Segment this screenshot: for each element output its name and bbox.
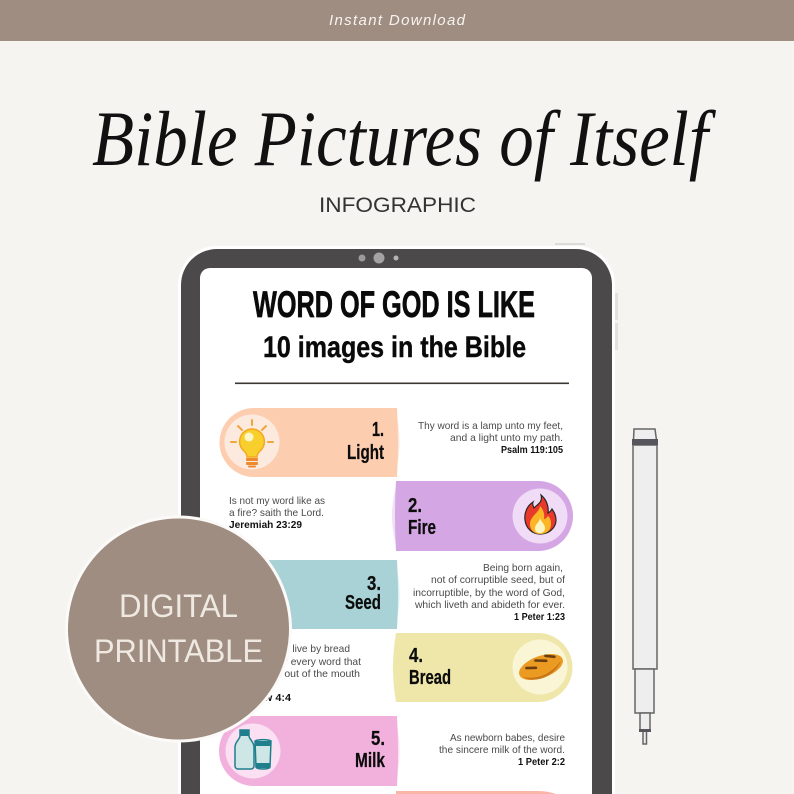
row 4: bread xyxy=(393,633,573,702)
icon: light bulb xyxy=(231,420,273,468)
verse 2: Jeremiah 23:29 xyxy=(229,519,302,531)
subtitle: INFOGRAPHIC xyxy=(319,194,476,217)
verse 5: the sincere milk of the word. xyxy=(439,744,565,756)
verse 4: proceedeth out of the mouth xyxy=(229,668,360,680)
row 2: fire xyxy=(392,481,573,551)
icon: flame xyxy=(525,495,556,534)
verse 4: Matthew 4:4 xyxy=(229,692,291,704)
verse 5: 1 Peter 2:2 xyxy=(518,756,565,768)
row 4: bread: 4. xyxy=(409,645,423,667)
verse 5 xyxy=(439,732,565,768)
row 3: seed xyxy=(220,560,400,629)
row 4: bread: Bread xyxy=(409,667,451,689)
verse 4: alone, but by every word that xyxy=(229,656,361,668)
verse 2: Is not my word like as xyxy=(229,495,325,507)
verse 1 xyxy=(418,420,563,456)
verse 2: a fire? saith the Lord. xyxy=(229,507,324,519)
verse 3: not of corruptible seed, but of xyxy=(431,574,565,586)
verse 3: Being born again, xyxy=(483,562,563,574)
verse 3: which liveth and abideth for ever. xyxy=(414,599,565,611)
row 3: seed: Seed xyxy=(345,592,381,614)
tablet device xyxy=(178,243,618,794)
icon: pen xyxy=(632,429,658,744)
verse 4: Man shall not live by bread xyxy=(229,643,350,655)
row 1: light: 1. xyxy=(372,419,384,441)
verse 1: Thy word is a lamp unto my feet, xyxy=(418,420,563,432)
badge: digital printable xyxy=(65,516,292,742)
verse 4 xyxy=(229,643,361,704)
verse 3: incorruptible, by the word of God, xyxy=(413,587,565,599)
badge: digital printable: PRINTABLE xyxy=(94,633,263,669)
row 5: milk xyxy=(219,716,400,786)
title: Bible Pictures of Itself xyxy=(92,95,716,182)
row 3: seed: 3. xyxy=(367,573,381,595)
verse 1: Psalm 119:105 xyxy=(501,444,563,456)
verse 2 xyxy=(229,495,325,531)
top banner: Instant Download xyxy=(329,12,466,29)
subheading: 10 images: 10 images in the Bible xyxy=(263,331,526,364)
row 6: partial pill xyxy=(396,791,556,794)
verse 3 xyxy=(413,562,565,623)
row 5: milk: Milk xyxy=(355,750,386,772)
row 5: milk: 5. xyxy=(371,728,385,750)
top banner xyxy=(0,0,794,41)
heading: word of god is like: WORD OF GOD IS LIKE xyxy=(253,284,535,325)
icon: milk bottle and glass xyxy=(235,730,271,769)
row 1: light: Light xyxy=(347,442,384,464)
row 1: light xyxy=(220,408,400,477)
verse 4: of God. xyxy=(229,680,263,692)
row 2: fire: 2. xyxy=(408,495,422,517)
row 2: fire: Fire xyxy=(408,517,436,539)
verse 3: 1 Peter 1:23 xyxy=(514,611,565,623)
icon: bread xyxy=(516,649,566,685)
verse 5: As newborn babes, desire xyxy=(450,732,565,744)
verse 1: and a light unto my path. xyxy=(450,432,563,444)
badge: digital printable: DIGITAL xyxy=(119,588,238,624)
